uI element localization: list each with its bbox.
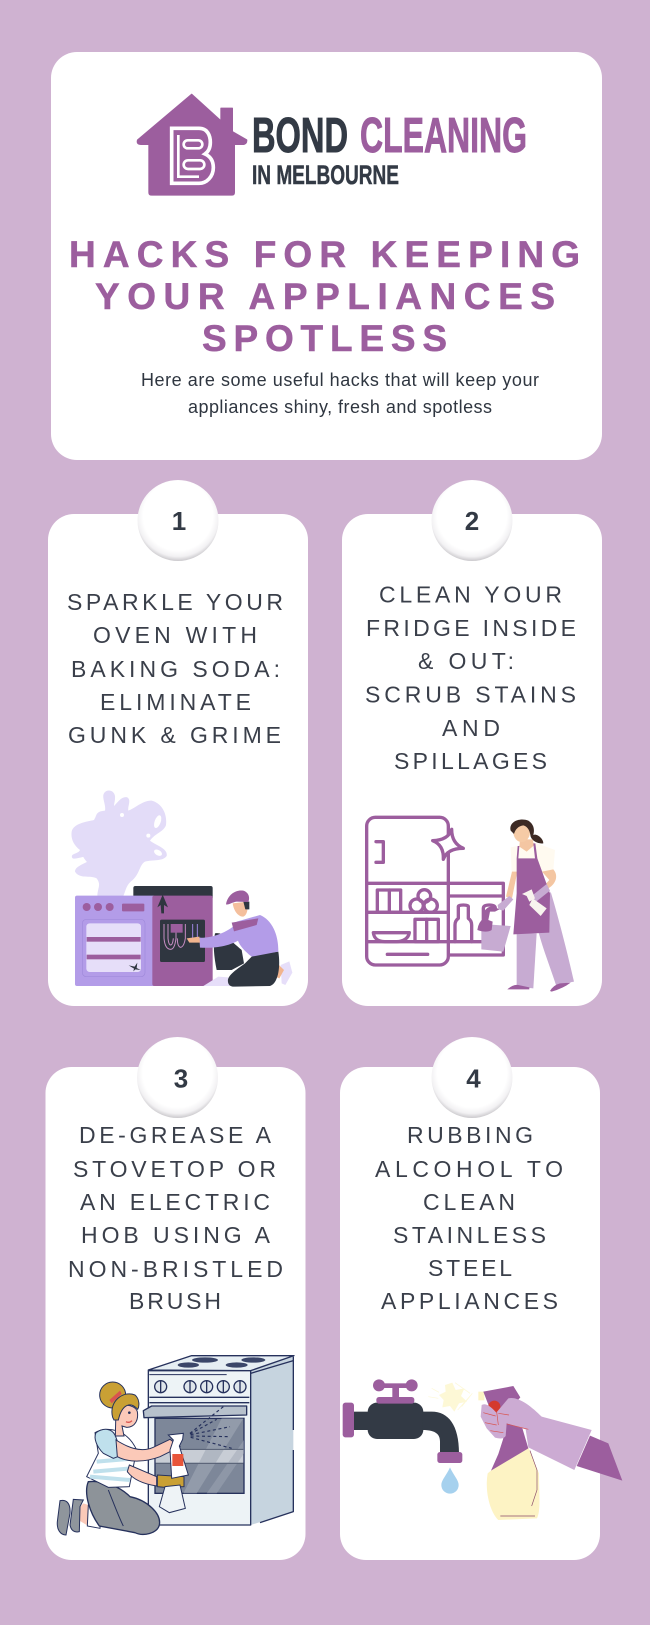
cleaning spray	[190, 1407, 232, 1448]
heading 1: SPARKLE YOUR	[67, 589, 283, 615]
subtitle	[141, 370, 539, 417]
title	[69, 234, 580, 359]
heading 3: HOB USING A	[81, 1222, 271, 1248]
logo wordmark	[252, 109, 527, 190]
heading 4: APPLIANCES	[381, 1288, 558, 1314]
illustration: oven repair	[71, 790, 292, 987]
wiring panel	[160, 920, 205, 962]
gloved hand and sleeve	[481, 1398, 622, 1481]
logo	[137, 94, 527, 195]
heading 4: ALCOHOL TO	[375, 1156, 563, 1182]
title: YOUR APPLIANCES	[95, 276, 555, 317]
number badge 1: 1	[172, 506, 186, 536]
oven handle	[143, 1406, 247, 1418]
number badge 3: 3	[174, 1064, 188, 1094]
heading 2: SCRUB STAINS	[365, 682, 576, 708]
heading 1: GUNK & GRIME	[68, 722, 281, 748]
icon: house logo mark	[137, 94, 247, 195]
fridge line art	[367, 817, 503, 965]
heading 2: SPILLAGES	[394, 748, 547, 774]
number badge 4	[432, 1037, 512, 1118]
number badge 4: 4	[466, 1064, 481, 1094]
heading 3: AN ELECTRIC	[80, 1189, 270, 1215]
heading 4: STEEL	[428, 1255, 512, 1281]
panel: hack 3 stovetop	[46, 1037, 306, 1560]
heading 3: BRUSH	[129, 1288, 221, 1314]
number badge 3	[137, 1037, 218, 1118]
heading 1: OVEN WITH	[93, 622, 257, 648]
heading 2: & OUT:	[418, 648, 514, 674]
stove	[148, 1356, 294, 1525]
technician	[214, 933, 244, 970]
heading 4	[375, 1122, 563, 1314]
panel: hack 4 stainless steel	[340, 1037, 622, 1560]
number badge 1	[138, 480, 218, 561]
spray bottle	[168, 1433, 188, 1478]
subtitle: Here are some useful hacks that will keep your	[141, 370, 539, 390]
cleaner woman	[517, 933, 537, 988]
logo wordmark: BOND	[252, 109, 348, 163]
spray bottle	[483, 1386, 539, 1520]
heading 4: RUBBING	[407, 1122, 533, 1148]
heading 3	[68, 1122, 283, 1314]
heading 4: STAINLESS	[393, 1222, 546, 1248]
heading 1	[67, 589, 283, 748]
subtitle: appliances shiny, fresh and spotless	[188, 397, 492, 417]
heading 3: DE-GREASE A	[79, 1122, 272, 1148]
panel: hack 2 fridge	[342, 480, 602, 1006]
number badge 2	[432, 480, 512, 561]
heading 3: NON-BRISTLED	[68, 1256, 283, 1282]
heading 2: AND	[442, 715, 500, 741]
illustration: tap and spray bottle	[343, 1379, 622, 1520]
yellow glove and cloth	[157, 1475, 184, 1487]
heading 2	[365, 582, 576, 774]
illustration: woman cleaning stove	[57, 1356, 294, 1535]
panel: hack 1 oven	[48, 480, 308, 1006]
heading 2: FRIDGE INSIDE	[366, 615, 576, 641]
heading 2: CLEAN YOUR	[379, 582, 562, 608]
heading 3: STOVETOP OR	[73, 1156, 276, 1182]
spray burst	[428, 1383, 484, 1412]
illustration: fridge and cleaner	[367, 817, 574, 992]
logo wordmark: CLEANING	[360, 109, 527, 163]
title: HACKS FOR KEEPING	[69, 234, 580, 275]
title: SPOTLESS	[202, 318, 447, 359]
panel: header	[51, 52, 602, 460]
woman	[72, 1503, 100, 1527]
heading 4: CLEAN	[423, 1189, 515, 1215]
icon: water tap	[343, 1379, 462, 1463]
heading 1: BAKING SODA:	[71, 656, 280, 682]
bucket	[481, 924, 511, 952]
logo wordmark: IN MELBOURNE	[252, 160, 399, 190]
number badge 2: 2	[465, 506, 479, 536]
oven window	[155, 1418, 244, 1493]
heading 1: ELIMINATE	[100, 689, 251, 715]
oven front	[133, 886, 213, 899]
water drop	[441, 1467, 459, 1494]
smoke cloud	[71, 790, 167, 896]
